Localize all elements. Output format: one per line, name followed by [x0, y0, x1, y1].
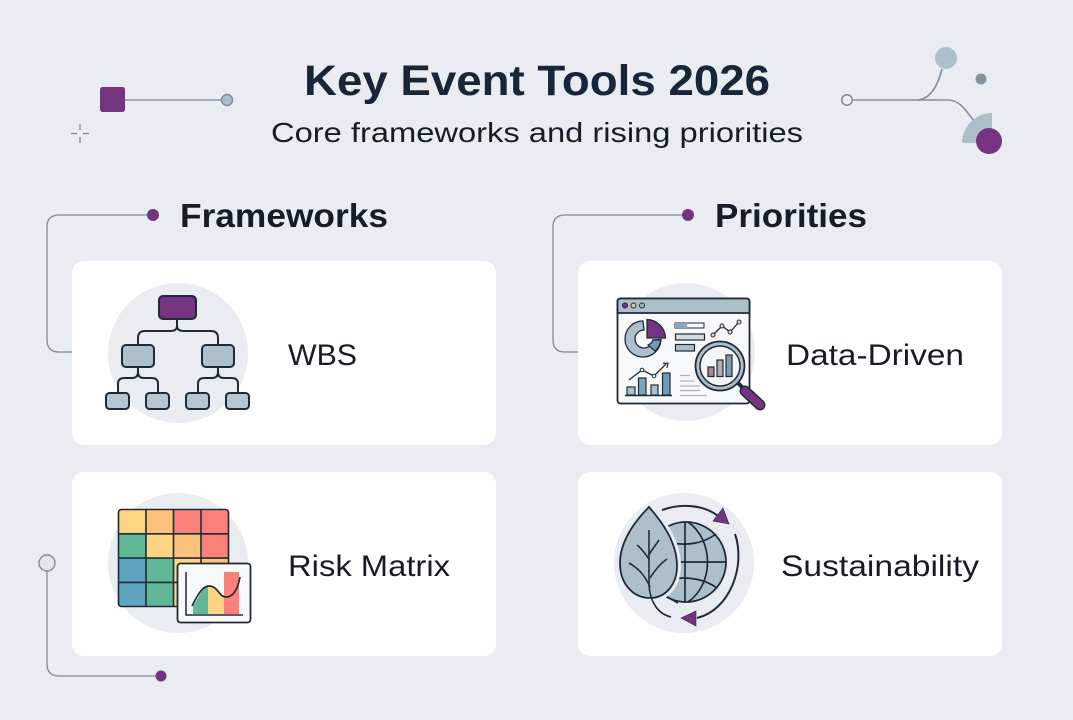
panel: Data-Driven: [578, 261, 1002, 445]
icon: leaf: [620, 507, 677, 617]
decoration: top right nodes: [842, 47, 1002, 154]
panel: Sustainability: [578, 472, 1002, 656]
icon: globe: [646, 522, 726, 603]
label: Sustainability: Sustainability: [781, 550, 979, 583]
icon: WBS tree: [106, 283, 249, 423]
icon: leaf and globe: [614, 493, 754, 633]
icon: chart inset: [178, 564, 250, 622]
panel: Risk Matrix: [72, 472, 496, 656]
icon: analytics dashboard: [617, 283, 760, 421]
connector: bottom left: [39, 555, 166, 682]
heading: Priorities: Priorities: [715, 197, 867, 234]
heading: Frameworks: Frameworks: [180, 197, 388, 234]
arrow: bottom: [681, 534, 738, 626]
title: Key Event Tools 2026: [304, 57, 770, 105]
connector: priorities: [553, 209, 694, 352]
connector: frameworks: [47, 209, 159, 352]
label: WBS: WBS: [288, 339, 357, 372]
arrow: top: [662, 506, 729, 524]
icon: risk matrix grid: [108, 493, 250, 633]
decoration: sparkle cross: [71, 124, 89, 143]
label: Data-Driven: Data-Driven: [786, 339, 964, 372]
subtitle: Core frameworks and rising priorities: [271, 117, 803, 148]
label: Risk Matrix: Risk Matrix: [288, 550, 450, 583]
panel: WBS: [72, 261, 496, 445]
decoration: top left node: [100, 87, 232, 112]
